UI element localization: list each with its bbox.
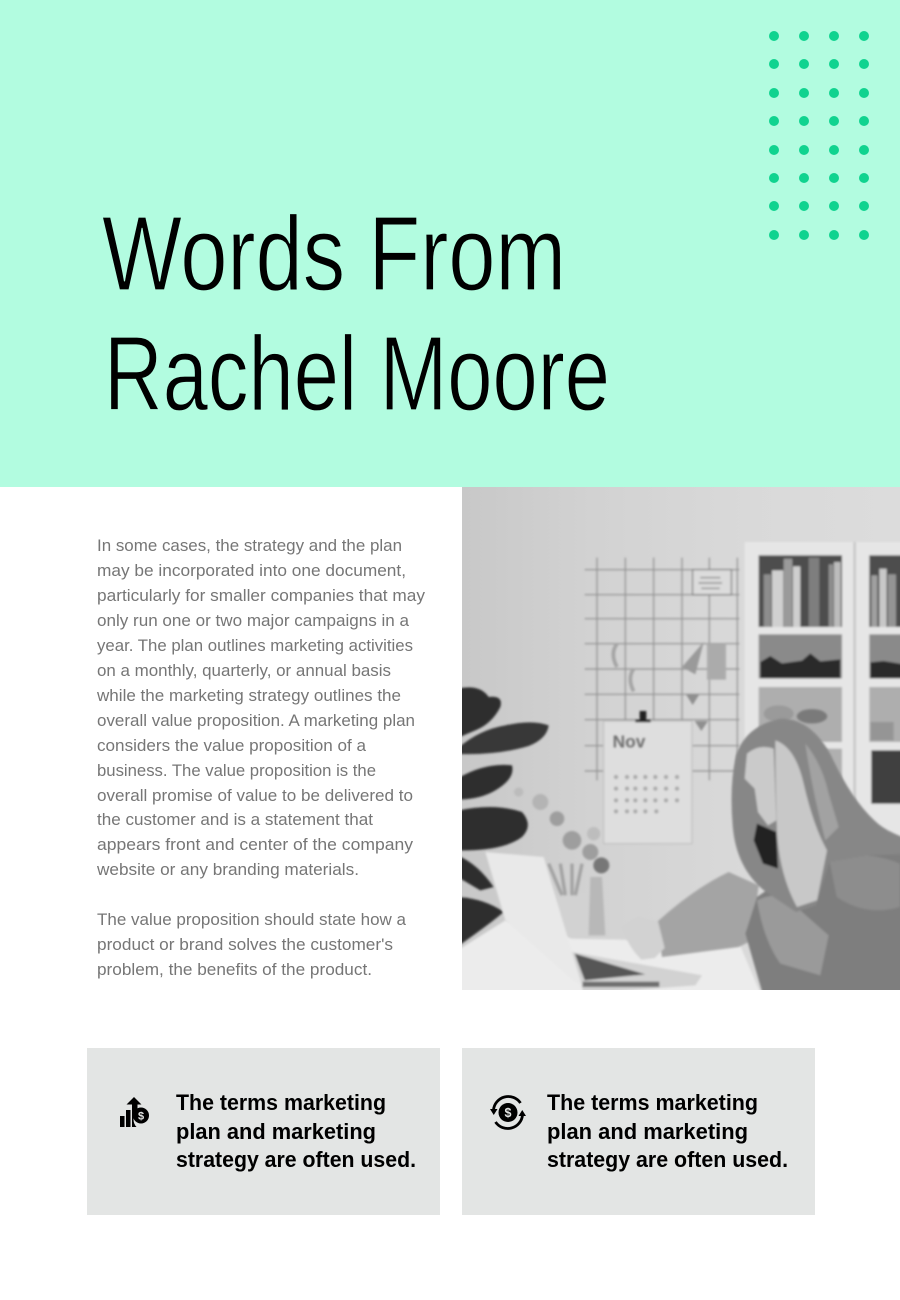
- body text: overall value proposition. A marketing plan: [97, 712, 415, 730]
- icon: growth chart with dollar: [120, 1097, 149, 1127]
- body text: [96, 537, 426, 979]
- card 2 text: [547, 1090, 788, 1172]
- body text: considers the value proposition of a: [97, 737, 367, 755]
- card 1 text: The terms marketing: [176, 1090, 386, 1115]
- header panel: [0, 0, 900, 487]
- wire grid: [585, 558, 739, 780]
- body text: on a monthly, quarterly, or annual basis: [97, 662, 391, 680]
- body text: year. The plan outlines marketing activities: [97, 637, 413, 655]
- body text: may be incorporated into one document,: [97, 562, 406, 580]
- photo: woman working at a desk: [452, 487, 900, 1020]
- calendar month: Nov: [613, 732, 646, 752]
- hand: [627, 922, 666, 960]
- desk: [462, 897, 760, 990]
- face: [745, 747, 776, 825]
- card 2: [462, 1048, 815, 1215]
- card 1 text: strategy are often used.: [176, 1147, 416, 1172]
- body text: the customer and is a statement that: [97, 811, 373, 829]
- woman: [627, 718, 900, 990]
- icon: dollar in circular arrows: $: [505, 1106, 512, 1120]
- body text: website or any branding materials.: [96, 861, 359, 879]
- icon: dollar in circular arrows: [490, 1096, 526, 1129]
- body text: only run one or two major campaigns in a: [97, 612, 410, 630]
- body text: product or brand solves the customer's: [97, 936, 393, 954]
- title: [102, 195, 610, 433]
- bookcase: [745, 542, 900, 842]
- plant: [462, 686, 550, 945]
- hair: [732, 719, 900, 912]
- forearm: [657, 872, 759, 957]
- body text: appears front and center of the company: [97, 836, 414, 854]
- card 1 text: [176, 1090, 416, 1172]
- card 1 text: plan and marketing: [176, 1119, 376, 1144]
- icon: growth chart with dollar: $: [138, 1110, 144, 1122]
- laptop: [572, 952, 702, 994]
- title: Words From: [102, 195, 566, 313]
- body text: The value proposition should state how a: [97, 911, 407, 929]
- torso: [745, 852, 900, 990]
- card 2 text: The terms marketing: [547, 1090, 758, 1115]
- phone: [754, 824, 778, 869]
- body text: business. The value proposition is the: [97, 762, 376, 780]
- card 2 text: plan and marketing: [547, 1119, 748, 1144]
- card 2 text: strategy are often used.: [547, 1147, 788, 1172]
- body text: particularly for smaller companies that may: [97, 587, 426, 605]
- body text: problem, the benefits of the product.: [97, 961, 372, 979]
- calendar: [604, 721, 692, 844]
- title: Rachel Moore: [104, 315, 610, 433]
- flowers and vase: [514, 787, 609, 873]
- body text: overall promise of value to be delivered to: [97, 787, 413, 805]
- body text: while the marketing strategy outlines the: [96, 687, 401, 705]
- card 1: [87, 1048, 440, 1215]
- body text: In some cases, the strategy and the plan: [97, 537, 402, 555]
- dot pattern: [769, 31, 869, 240]
